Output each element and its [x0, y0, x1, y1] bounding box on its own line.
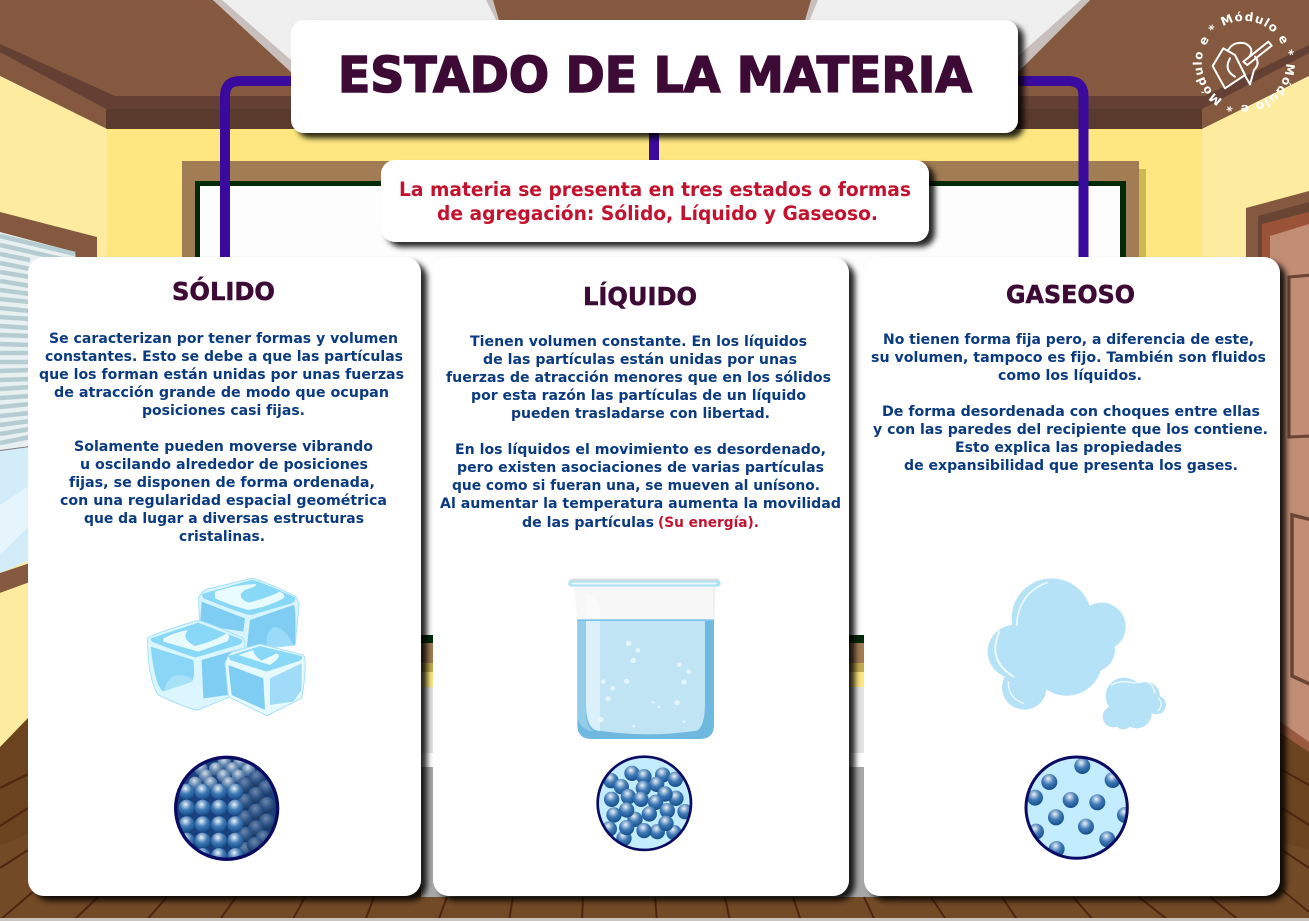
- text: sólido description: Solamente pueden moverse vibrando: [74, 439, 373, 455]
- icon: book and pencil: [1213, 42, 1272, 88]
- text: sólido description: posiciones casi fijas.: [142, 403, 305, 419]
- text: sólido description: Se caracterizan por tener formas y volumen: [49, 331, 398, 347]
- icon: beaker: [568, 579, 721, 739]
- text: sólido description: cristalinas.: [179, 529, 265, 545]
- text: líquido description: [440, 334, 841, 531]
- text: gaseoso description: su volumen, tampoco es fijo. También son fluidos: [871, 350, 1266, 366]
- text: líquido description: pueden trasladarse con libertad.: [511, 406, 770, 422]
- text: gaseoso description: como los líquidos.: [998, 368, 1142, 384]
- intro text: de agregación: Sólido, Líquido y Gaseoso.: [437, 202, 878, 225]
- left wall: [0, 76, 107, 760]
- connectors: [225, 81, 1084, 262]
- title: ESTADO DE LA MATERIA: [338, 47, 972, 104]
- particles: gaseoso: [1026, 757, 1133, 858]
- text: líquido description: (Su energía).: [658, 515, 759, 531]
- text: gaseoso description: de expansibilidad que presenta los gases.: [904, 458, 1238, 474]
- panel: sólido: [28, 257, 421, 896]
- text: líquido description: Al aumentar la temperatura aumenta la movilidad: [440, 496, 841, 512]
- text: gaseoso description: Esto explica las propiedades: [955, 440, 1182, 456]
- text: gaseoso description: De forma desordenada con choques entre ellas: [882, 404, 1260, 420]
- text: sólido description: fijas, se disponen de forma ordenada,: [69, 475, 375, 491]
- window frame: [1139, 169, 1146, 689]
- text: gaseoso description: [871, 332, 1268, 474]
- particles: líquido: [598, 757, 693, 850]
- text: gaseoso description: y con las paredes del recipiente que los contiene.: [873, 422, 1268, 438]
- text: sólido description: u oscilando alrededor de posiciones: [80, 457, 368, 473]
- text: sólido description: de atracción grande de modo que ocupan: [54, 385, 389, 401]
- intro callout: [381, 160, 929, 242]
- text: sólido description: [39, 331, 404, 545]
- ceiling: [0, 0, 1309, 129]
- text: sólido description: constantes. Esto se debe a que las partículas: [45, 349, 403, 365]
- text: sólido description: con una regularidad espacial geométrica: [60, 493, 387, 509]
- text: líquido description: de las partículas: [522, 515, 654, 531]
- intro text: [399, 178, 911, 225]
- heading: líquido: LÍQUIDO: [583, 282, 697, 311]
- text: líquido description: de las partículas están unidas por unas: [483, 352, 797, 368]
- floor: [0, 718, 421, 921]
- text: líquido description: En los líquidos el movimiento es desordenado,: [455, 442, 826, 458]
- icon: gas clouds: [988, 578, 1166, 729]
- text: líquido description: pero existen asociaciones de varias partículas: [457, 460, 824, 476]
- text: sólido description: que da lugar a diversas estructuras: [84, 511, 364, 527]
- panel: gaseoso: [864, 257, 1280, 896]
- logo: Módulo e: Módulo e * Módulo e * Módulo e *: [1192, 11, 1295, 112]
- left window: [0, 212, 97, 300]
- heading: sólido: SÓLIDO: [172, 276, 275, 306]
- text: líquido description: por esta razón las partículas de un líquido: [471, 388, 806, 404]
- panel: líquido: [433, 257, 849, 896]
- particles: sólido: [176, 756, 278, 864]
- intro text: La materia se presenta en tres estados o formas: [399, 178, 911, 201]
- text: gaseoso description: No tienen forma fija pero, a diferencia de este,: [883, 332, 1254, 348]
- icon: ice cubes: [147, 578, 305, 716]
- door: [1246, 191, 1309, 800]
- text: líquido description: que como si fueran una, se mueven al unísono.: [452, 478, 820, 494]
- text: líquido description: fuerzas de atracción menores que en los sólidos: [446, 370, 831, 386]
- right wall: [1202, 76, 1309, 760]
- text: sólido description: que los forman están unidas por unas fuerzas: [39, 367, 404, 383]
- heading: gaseoso: GASEOSO: [1006, 280, 1135, 309]
- title box: [291, 20, 1018, 133]
- text: líquido description: Tienen volumen constante. En los líquidos: [470, 334, 807, 350]
